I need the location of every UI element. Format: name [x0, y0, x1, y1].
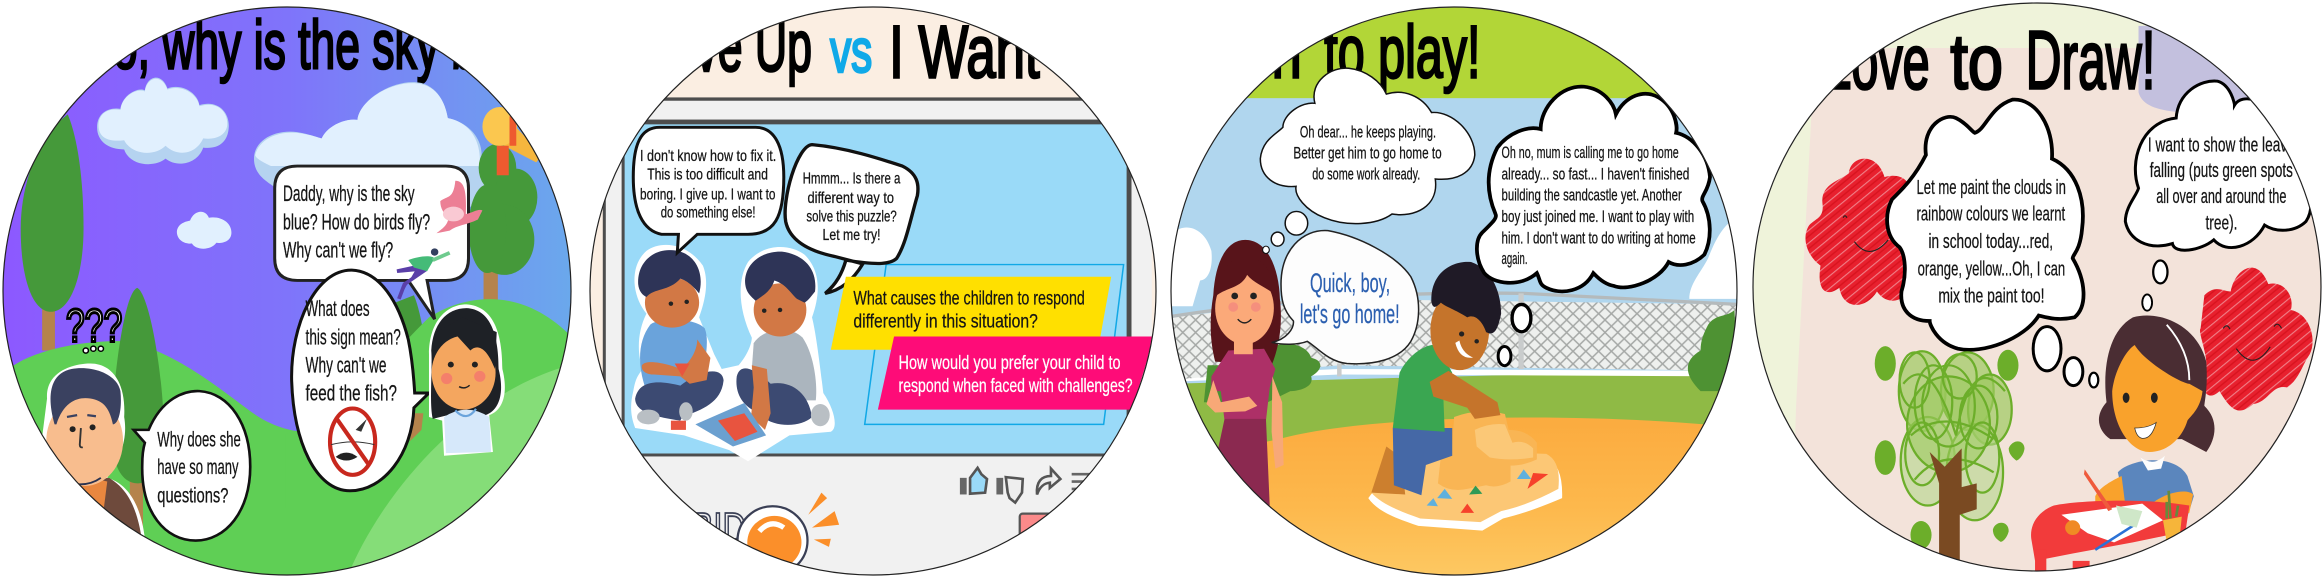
- red cloud: right: [2200, 268, 2313, 411]
- frame: circle four outline: [1753, 3, 2321, 571]
- frame: circle two outline: [590, 7, 1156, 575]
- character: boy playing: [1371, 262, 1501, 495]
- thought bubble: mother: do some work already.: [1312, 165, 1420, 184]
- thought bubble: boy: building the sandcastle yet. Another: [1502, 186, 1682, 204]
- icon: no feeding sign: [330, 408, 375, 475]
- heading: give up vs I want: [702, 22, 1040, 88]
- clouds: background: [1170, 218, 1742, 306]
- thought bubble: mother: Oh dear... he keeps playing.: [1300, 122, 1436, 141]
- grass: [1170, 369, 1746, 461]
- thought bubble: boy: him. I don't want to do writing at home: [1502, 229, 1696, 248]
- tree: behind hill: [396, 295, 422, 338]
- heading: give up vs I want: I Want: [889, 11, 1040, 93]
- icon: thumbs up: [960, 468, 987, 494]
- cloud: small centre: [177, 212, 231, 249]
- heading: want to play: n: [1272, 11, 1302, 93]
- thought dots: second: [2142, 261, 2167, 311]
- puzzle on floor: [671, 403, 766, 446]
- thought bubble: boy: boy just joined me. I want to play with: [1502, 207, 1694, 226]
- speech bubble: sign question: this sign mean?: [306, 324, 401, 349]
- character: mother: [1207, 240, 1284, 506]
- thought bubble: boy: again.: [1502, 249, 1527, 268]
- heading: why is the sky blue: o, why is the sky b: [113, 7, 476, 83]
- speech bubble: sky question: Daddy, why is the sky: [283, 181, 415, 206]
- speech bubble: father: Why does she: [157, 427, 241, 451]
- frame: circle one outline: [3, 7, 571, 575]
- sky background: [4, 8, 570, 431]
- green header band: [1170, 0, 1746, 98]
- panel: give up vs I want scene: [590, 0, 1166, 577]
- callout: yellow question: differently in this situation?: [853, 311, 1038, 333]
- speech bubble: try another way: different way to: [808, 190, 894, 207]
- pencil cup: [2163, 491, 2182, 542]
- speech bubble: try another way: Hmmm... Is there a: [803, 171, 901, 187]
- paper background: [1790, 48, 2324, 577]
- panel: want to play scene: [1170, 0, 1746, 577]
- cloud: upper left: [97, 78, 229, 164]
- thought dots: boy: [1498, 304, 1531, 366]
- page background: [590, 8, 1156, 373]
- red cloud: left: [1805, 159, 1911, 305]
- outline panel: [865, 265, 1124, 424]
- sandcastle: [1368, 411, 1562, 531]
- icon: pink bird: [437, 181, 482, 233]
- video player frame: [603, 97, 1152, 577]
- heading: love to draw: [1824, 13, 2155, 106]
- frame: circle three outline: [1171, 7, 1737, 575]
- heading: give up vs I want: vs: [830, 17, 872, 86]
- hill: light slope: [352, 368, 560, 567]
- thought dots: first: [2033, 327, 2098, 387]
- video screen: [623, 123, 1128, 455]
- speech bubble: sign question: feed the fish?: [306, 381, 397, 405]
- callout: pink question: respond when faced with challenges?: [899, 375, 1133, 397]
- thought bubble: mother: Better get him to go home to: [1293, 144, 1442, 163]
- speech bubble: try another way: solve this puzzle?: [806, 209, 897, 225]
- callout: pink question: [878, 337, 1154, 410]
- logo: orange badge: [692, 493, 839, 575]
- speech bubble: try another way: [785, 145, 918, 293]
- speech bubble: quick boy: let's go home!: [1300, 299, 1400, 329]
- icon: thumbs down: [996, 477, 1023, 503]
- speech cloud: clouds in rainbow: in school today...red,: [1929, 231, 2053, 253]
- speech cloud: clouds in rainbow: orange, yellow...Oh, I can: [1918, 259, 2065, 281]
- speech bubble: give up: I don't know how to fix it.: [640, 148, 776, 165]
- table with paper: [2031, 501, 2189, 577]
- speech bubble: sky question: Why can't we fly?: [283, 238, 393, 263]
- speech bubble: sign question: [292, 270, 429, 491]
- character: girl drawing: [2095, 315, 2215, 520]
- speech bubble: sign question: What does: [306, 296, 370, 321]
- character: boy left: [635, 250, 724, 424]
- speech bubble: give up: [633, 127, 784, 253]
- tree: middle cone: [116, 288, 163, 526]
- panel: why is the sky blue scene: [0, 0, 576, 577]
- speech bubble: quick boy: Quick, boy,: [1310, 268, 1390, 298]
- speech bubble: father: [134, 391, 250, 541]
- speech cloud: clouds in rainbow: mix the paint too!: [1938, 286, 2044, 308]
- purple corner: [2139, 26, 2324, 113]
- character: father: [41, 363, 145, 539]
- hill: left: [14, 341, 296, 574]
- speech cloud: clouds in rainbow: [1887, 100, 2084, 350]
- thought bubble: boy: already... so fast... I haven't finished: [1502, 165, 1689, 184]
- speech cloud: clouds in rainbow: Let me paint the clouds in: [1917, 177, 2066, 199]
- trunk: behind speech bubble: [410, 413, 423, 441]
- heading: love to draw: to: [1950, 18, 2003, 105]
- speech bubble: give up: do something else!: [661, 205, 756, 222]
- icon: question marks: [66, 308, 122, 354]
- heading: want to play: to play!: [1324, 11, 1480, 93]
- speech bubble: give up: boring. I give up. I want to: [640, 186, 776, 203]
- character: daughter: [429, 304, 505, 456]
- drawing: tree trunk: [1930, 448, 1977, 561]
- bush: right: [1688, 310, 1738, 391]
- callout: yellow question: What causes the children to respond: [853, 288, 1085, 309]
- speech bubble: give up: This is too difficult and: [647, 167, 768, 184]
- sand: [1170, 417, 1746, 577]
- drawing: falling leaves: [1875, 346, 2025, 549]
- character: boy right: [736, 252, 830, 430]
- thought dots: mother: [1263, 211, 1308, 254]
- bush: behind mother: [1204, 344, 1320, 402]
- heading: want to play: [1272, 11, 1480, 93]
- speech cloud: leaves falling: [2125, 81, 2311, 250]
- crayon: [2084, 469, 2112, 511]
- heading: give up vs I want: ve Up: [695, 6, 812, 87]
- speech cloud: leaves falling: tree).: [2206, 213, 2237, 234]
- icon: flying person: [397, 248, 450, 299]
- speech bubble: father: questions?: [157, 483, 228, 508]
- floor sticker outline: [631, 245, 835, 461]
- callout: yellow question: [831, 277, 1111, 350]
- speech bubble: try another way: Let me try!: [823, 227, 881, 244]
- fence: [1170, 293, 1738, 380]
- callout: pink question: How would you prefer your child to: [899, 352, 1121, 374]
- speech bubble: sign question: Why can't we: [306, 353, 386, 378]
- outer wall: [1734, 0, 2324, 577]
- speech bubble: sky question: [275, 166, 468, 319]
- speech cloud: clouds in rainbow: rainbow colours we learnt: [1917, 203, 2065, 225]
- thought bubble: mother: [1260, 68, 1475, 224]
- thought bubble: boy: Oh no, mum is calling me to go home: [1502, 143, 1679, 162]
- icon: share arrow: [1037, 469, 1060, 494]
- icon: question marks: ???: [66, 300, 122, 351]
- heading: love to draw: Love: [1824, 18, 1930, 105]
- drawing: scribbled tree: [1899, 351, 2012, 520]
- icon: menu lines: [1072, 474, 1094, 489]
- logo: orange badge: BID: [692, 505, 746, 552]
- heading: love to draw: Draw!: [2026, 13, 2155, 106]
- speech bubble: father: have so many: [157, 454, 239, 479]
- tree: tall left: [21, 114, 84, 351]
- button: red corner: [1020, 514, 1061, 539]
- sky: [1170, 96, 1746, 391]
- white kerb: [1170, 369, 1738, 382]
- speech bubble: quick boy: [1272, 231, 1419, 364]
- thought bubble: boy: [1477, 87, 1710, 291]
- panel: love to draw scene: [1734, 0, 2324, 577]
- cloud: upper right: [254, 82, 497, 207]
- tree: right with kite: [468, 107, 542, 301]
- speech bubble: sky question: blue? How do birds fly?: [283, 210, 430, 234]
- hill: right: [296, 299, 568, 544]
